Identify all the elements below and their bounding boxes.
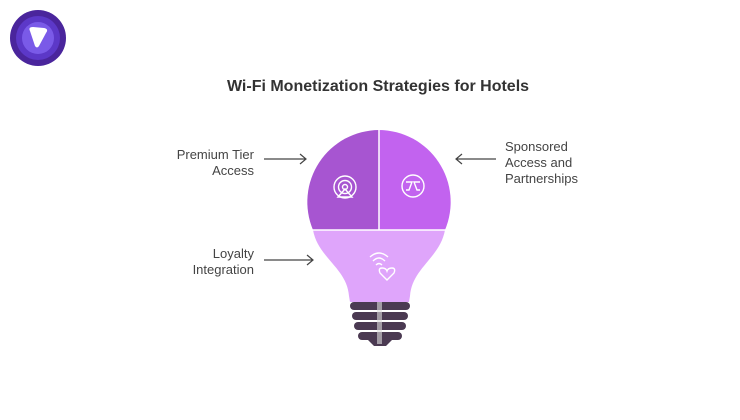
bulb lower	[313, 230, 445, 302]
label: sponsored: Partnerships	[505, 171, 578, 186]
logo	[10, 10, 66, 66]
arrows	[264, 154, 496, 265]
bulb top left	[307, 130, 379, 230]
label: loyalty	[193, 246, 254, 277]
label: loyalty: Integration	[193, 262, 254, 277]
screw base	[350, 302, 410, 346]
label: sponsored: Sponsored	[505, 139, 568, 154]
icons	[334, 175, 424, 280]
label: premium tier: Access	[212, 163, 254, 178]
label: sponsored: Access and	[505, 155, 572, 170]
label: sponsored	[505, 139, 578, 186]
label: premium tier: Premium Tier	[177, 147, 254, 162]
bulb top right	[379, 130, 451, 230]
title: Wi-Fi Monetization Strategies for Hotels	[227, 78, 529, 95]
label: loyalty: Loyalty	[213, 246, 254, 261]
label: premium tier	[177, 147, 254, 178]
